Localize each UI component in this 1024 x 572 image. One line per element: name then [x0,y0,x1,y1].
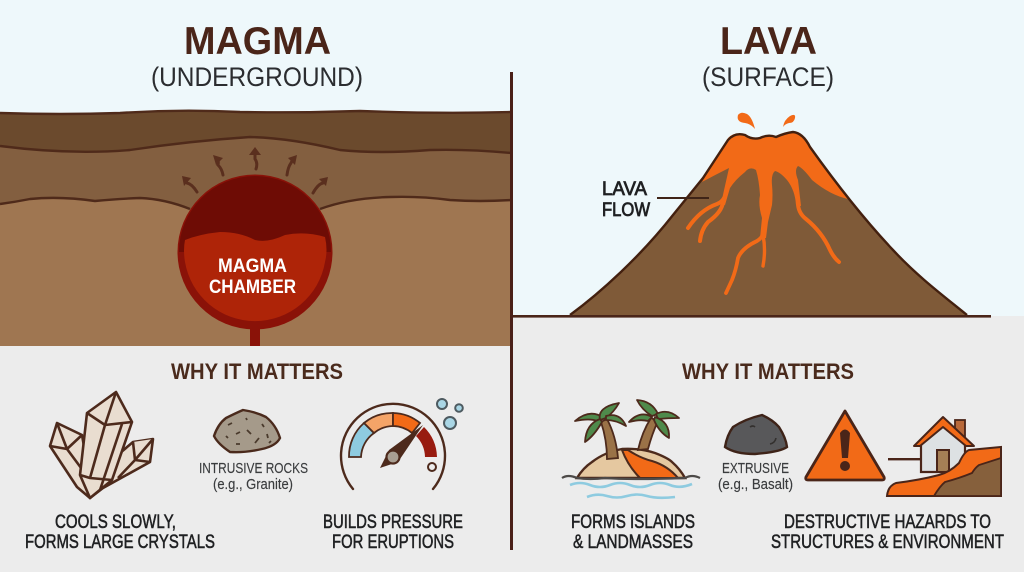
title: lava: LAVA [720,20,817,63]
subtitle: underground: (UNDERGROUND) [151,62,363,92]
lava droplet right [783,115,795,127]
magma conduit [250,325,260,346]
caption: crystals [25,512,215,553]
icon: granite rock [214,410,280,452]
caption: extrusive [718,461,793,493]
lava streams [688,198,839,293]
panel: lava why it matters [562,359,1004,553]
lava flow label: LAVA [602,179,647,200]
caption: crystals: COOLS SLOWLY, [55,512,176,533]
rock layer: top [0,111,511,153]
chamber label line 2: CHAMBER [209,277,296,298]
ground line [512,315,991,318]
caption: intrusive rocks: INTRUSIVE ROCKS [199,461,308,477]
icon: crystals [50,392,153,498]
caption: islands [571,512,695,553]
lava crater flow [702,133,848,238]
caption: extrusive: (e.g., Basalt) [718,477,793,493]
icon: warning triangle [806,411,884,480]
caption: islands: FORMS ISLANDS [571,512,695,533]
rock layer: deep [0,190,511,346]
chamber label: MAGMA [218,256,287,277]
caption: hazards [771,512,1004,553]
caption: pressure: BUILDS PRESSURE [323,512,463,533]
icon: pressure gauge [341,404,445,489]
lava droplet left [738,113,755,129]
caption: pressure [323,512,463,553]
caption: extrusive: EXTRUSIVE [722,461,789,477]
icon: bubbles [437,399,463,429]
panel: underground cross-section [0,111,511,346]
icon: house and lava hazard [887,417,1001,496]
divider [510,72,513,550]
subtitle: surface: (SURFACE) [702,62,834,92]
icon: basalt rock [725,415,787,454]
magma chamber [178,174,332,330]
icon: island [562,400,700,498]
heading: WHY IT MATTERS [682,359,854,384]
panel: magma why it matters [25,359,463,553]
lava flow label [602,179,709,221]
volcano body [570,132,967,315]
title: magma: MAGMA [184,20,331,63]
caption: islands: & LANDMASSES [573,532,693,553]
heading: WHY IT MATTERS [171,359,343,384]
layer boundary lines [0,111,511,209]
rock layer: middle [0,125,511,209]
caption: intrusive rocks: (e.g., Granite) [213,477,293,493]
panel: volcano [512,113,991,318]
caption: crystals: FORMS LARGE CRYSTALS [25,532,215,553]
caption: intrusive rocks [199,461,308,493]
volcano outline [570,132,967,315]
caption: pressure: FOR ERUPTIONS [332,532,454,553]
rising heat arrows [182,147,328,193]
lava flow label: FLOW [602,200,650,221]
